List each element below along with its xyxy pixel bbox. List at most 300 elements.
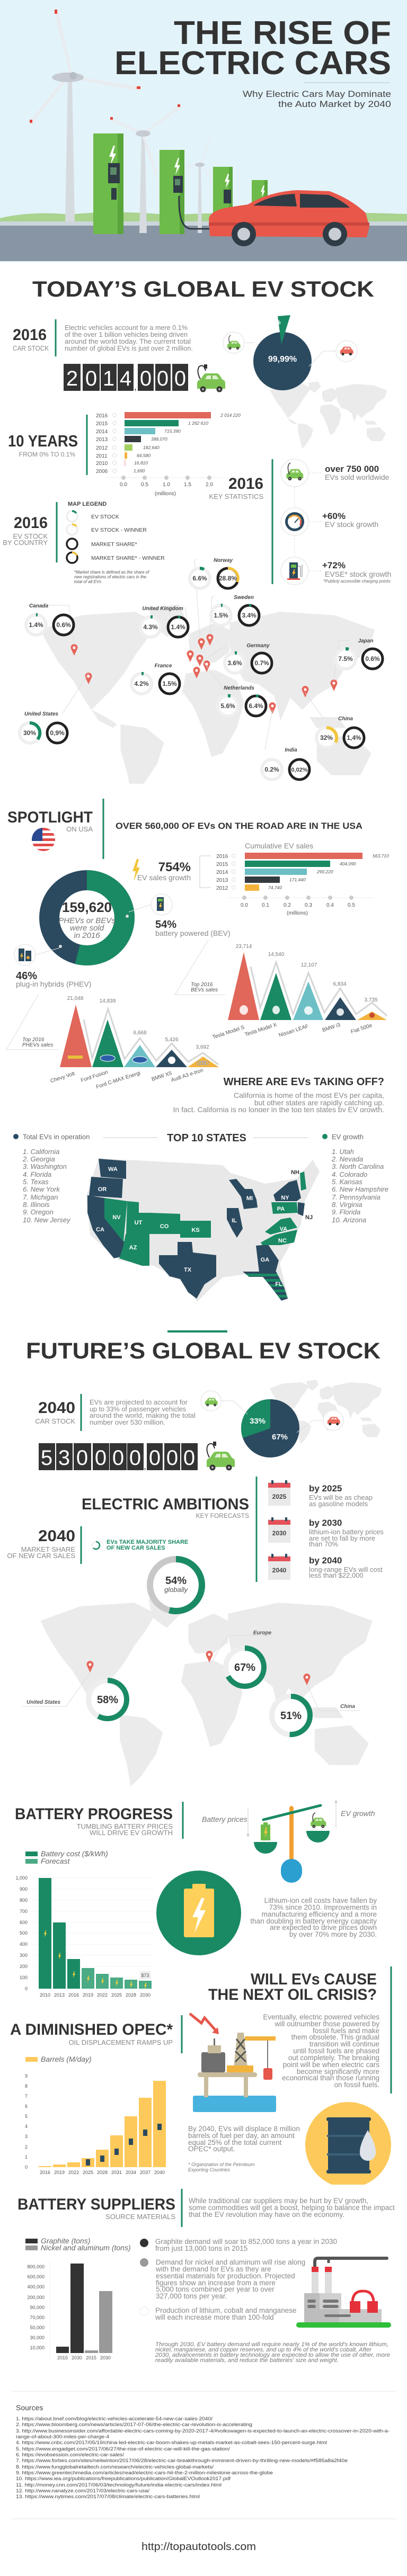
- odometer 2,014,000: 0: [85, 367, 97, 390]
- bar chart: cumulative EV sales: 0.0: [241, 902, 248, 908]
- country: United States: 0,9%: [50, 729, 65, 737]
- label: battery prices arrow down: Battery prices: [202, 1815, 247, 1823]
- pie chart: 0.1% vs 99.99%: 99,99%: [268, 355, 297, 364]
- map legend: EV STOCK - WINNER: [91, 527, 147, 533]
- odometer 2,014,000: ,: [134, 381, 137, 392]
- text: EVs outnumber fossil: [263, 2013, 379, 2089]
- sources list: 8. https://www.fungglobalretailtech.com/research/electric-vehicles-global-markets/: [16, 2464, 214, 2470]
- bar chart: oil displacement: 2028: [97, 2170, 108, 2175]
- country: Canada: 1.4%: [29, 621, 43, 629]
- bar chart: cumulative EV sales: 2016: [216, 854, 228, 860]
- legend: graphite and nickel: Graphite (tons): [41, 2237, 90, 2245]
- key stat: EV stock growth: [281, 508, 378, 535]
- odometer 2,014,000: 0: [140, 367, 152, 390]
- bar chart: graphite and nickel: 600,000: [27, 2274, 45, 2279]
- chart: top 2016 PHEV sales: 5,426: [165, 1037, 179, 1043]
- odometer 530,000,000: 0: [166, 1446, 178, 1470]
- windmill large: [29, 10, 141, 221]
- donut: Europe 67%: Europe: [253, 1630, 272, 1636]
- illustration: oil rig: [193, 2033, 276, 2112]
- bar chart: oil displacement: 3: [25, 2134, 28, 2139]
- sources list: 9. https://www.greentechmedia.com/articles/read/electric-cars-hit-the-2-million-milestone-across-the-globe: [16, 2470, 273, 2475]
- text: lithium-ion costs: by over 70% more by 2030.: [289, 1930, 377, 1938]
- country: Netherlands: 6.4%: [249, 702, 263, 710]
- US map: CA: [96, 1227, 104, 1233]
- 2016 EV stock by country label: EV STOCK: [13, 532, 48, 540]
- country: India: [262, 747, 309, 780]
- windmill medium: [110, 104, 181, 233]
- bullet: lithium cobalt manganese: [140, 2306, 296, 2321]
- chart: top 2016 BEV sales: [175, 940, 387, 1041]
- subtitle: the Auto Market by 2040: [278, 99, 391, 109]
- list: EV growth: 9. Florida: [332, 1208, 360, 1216]
- 2016 car stock label: CAR STOCK: [13, 344, 49, 352]
- bar chart: global EV stock 2006-2016: 2006: [96, 469, 108, 475]
- country: Norway: 6.6%: [192, 575, 207, 582]
- bar chart: graphite and nickel: 200,000: [27, 2295, 45, 2300]
- 2016 EV stock by country label: 2016: [14, 514, 48, 532]
- heading: electric ambitions: ELECTRIC AMBITIONS: [82, 1496, 249, 1513]
- bar chart: oil displacement: 2: [25, 2144, 28, 2150]
- charging stations: [93, 133, 268, 234]
- text: 8 million barrels: [188, 2125, 300, 2172]
- icon: green car with plug: [197, 364, 225, 392]
- bar chart: battery cost: 600: [20, 1920, 28, 1925]
- text: reserves note: Through 2030, EV battery demand will require nearly 1% of the world's known lithium,: [155, 2341, 388, 2348]
- bar chart: battery cost: $73: [141, 1973, 149, 1978]
- 2016 car stock label: 2016: [13, 326, 47, 344]
- key stat: EVSE growth: [281, 557, 391, 585]
- forecast: 2030: [268, 1517, 384, 1548]
- 2016 car stock label: [13, 326, 49, 352]
- callout: 46% PHEV: plug-in hybrids (PHEV): [16, 980, 91, 988]
- country: Germany: Germany: [246, 643, 270, 649]
- text: EVs outnumber fossil: out completely. The breaking: [288, 2054, 379, 2062]
- icon: EV in circle: [223, 332, 254, 353]
- chart: top 2016 BEV sales: Top 2016: [191, 982, 213, 988]
- sources list: range-of-about-300-miles-per-charge-4: [16, 2434, 109, 2439]
- sources list: 7. https://www.forbes.com/sites/neilwinton/2017/06/28/electric-car-breakthrough-imminent-driven-by-thrilling-new-models/#f585a8a2f40e: [16, 2458, 348, 2463]
- bar chart: global EV stock 2006-2016: 1 262 610: [188, 421, 208, 426]
- donut: Europe 67%: [206, 1630, 272, 1686]
- text: EVs outnumber fossil: economical than those running: [282, 2074, 379, 2082]
- text: lithium-ion costs: Lithium-ion cell costs have fallen by: [264, 1897, 377, 1904]
- forecast: 2030: are set to fall by more: [309, 1534, 375, 1542]
- list: total EVs: 10. New Jersey: [23, 1216, 71, 1224]
- bar chart: graphite and nickel: 10,000: [30, 2345, 45, 2350]
- bar chart: battery cost: 300: [20, 1953, 28, 1958]
- country: China: [316, 716, 364, 748]
- bar chart: cumulative EV sales: 0.2: [284, 902, 291, 908]
- text: lithium-ion costs: than doubling in battery energy capacity: [250, 1917, 377, 1925]
- 2040 car stock text: EVs are projected to account for: [90, 1398, 188, 1406]
- bar chart: cumulative EV sales: 171,440: [289, 877, 306, 882]
- donut: China 51%: 51%: [280, 1710, 302, 1722]
- US map: VA: [280, 1226, 287, 1232]
- pie chart: 0.1% vs 99.99%: [253, 315, 312, 390]
- text: lithium-ion costs: manufacturing efficiency and a more: [262, 1910, 377, 1918]
- country: Netherlands: Netherlands: [224, 685, 254, 691]
- bar chart: global EV stock 2006-2016: 2015: [96, 421, 108, 427]
- map legend: EV STOCK: [91, 514, 119, 520]
- bullet: nickel and aluminum: Demand for nickel and aluminum will rise along: [156, 2258, 305, 2266]
- odometer 530,000,000: [39, 1443, 198, 1471]
- 2040 market share label: OF NEW CAR SALES: [7, 1552, 75, 1560]
- 2016 key statistics label: 2016: [228, 475, 263, 493]
- heading: battery progress: WILL DRIVE EV GROWTH: [90, 1829, 173, 1837]
- country: Japan: 0.6%: [365, 655, 380, 663]
- text: EVs outnumber fossil: until fossil fuels are phased: [293, 2047, 379, 2055]
- bar chart: oil displacement: 9: [25, 2073, 28, 2079]
- car stock text: number of global EVs is just over 2 million.: [65, 344, 193, 352]
- heading: a diminished OPEC: [10, 2021, 173, 2046]
- list: total EVs: 2. Georgia: [22, 1155, 55, 1163]
- bar chart: cumulative EV sales: (millions): [287, 910, 308, 916]
- 2016 key statistics label: KEY STATISTICS: [209, 493, 263, 500]
- legend: EV growth: EV growth: [332, 1133, 364, 1141]
- section: world map EV stock by country: [18, 558, 384, 784]
- US map: IL: [232, 1218, 237, 1224]
- bar chart: graphite and nickel: 2030: [72, 2355, 82, 2360]
- red car: [209, 190, 369, 246]
- title: ELECTRIC CARS: [114, 45, 391, 82]
- pie chart: 33% vs 67%: 33%: [250, 1417, 266, 1426]
- bar chart: oil displacement: 2040: [154, 2170, 165, 2175]
- bar chart: oil displacement: 2025: [83, 2170, 93, 2175]
- bar chart: global EV stock 2006-2016: 388,070: [151, 436, 167, 442]
- bar chart: battery cost: 2025: [111, 1992, 122, 1998]
- odometer 2,014,000: [64, 364, 188, 392]
- country: United Kingdom: 4.3%: [143, 623, 158, 631]
- faint map behind pie: [270, 1380, 382, 1444]
- heading: battery suppliers: [17, 2196, 175, 2221]
- bar chart: global EV stock 2006-2016: 2014: [96, 429, 108, 435]
- chart: top 2016 PHEV sales: 21,048: [67, 996, 84, 1001]
- key stat: EVs sold: EVs sold worldwide: [325, 473, 390, 481]
- sources list: 10. https://www.iea.org/publications/freepublications/publication/GlobalEVOutlook2017.pdf: [16, 2476, 231, 2481]
- key stat: EVs sold: over 750 000: [325, 464, 379, 474]
- text: California note: California is home of the most EVs per capita,: [234, 1091, 384, 1099]
- text: California note: [173, 1091, 384, 1114]
- legend: battery cost: [25, 1849, 108, 1865]
- label: EV growth arrow up: [334, 1800, 375, 1828]
- bar chart: graphite and nickel: 90,000: [30, 2305, 45, 2310]
- sources list: 4. https://www.cnbc.com/2017/05/19/china-led-electric-car-boom-shakes-up-metals-market-as-cobalt-sees-150-percent-surge.html: [16, 2440, 327, 2445]
- bar chart: cumulative EV sales: [200, 842, 389, 916]
- legend: total EVs: Total EVs in operation: [23, 1133, 90, 1141]
- list: total EVs: 9. Oregon: [23, 1208, 54, 1216]
- bar chart: oil displacement: 5: [25, 2114, 28, 2119]
- stat: 754% sales growth: [132, 859, 191, 882]
- bar chart: oil displacement: 7: [25, 2094, 28, 2099]
- text: EVs outnumber fossil: Eventually, electric powered vehicles: [263, 2013, 379, 2021]
- map legend: total of all EVs: [74, 579, 101, 584]
- sources list: 6. https://evobsession.com/electric-car-sales/: [16, 2452, 125, 2457]
- list: EV growth: 5. Kansas: [332, 1178, 362, 1186]
- callout: EVs take majority share: [92, 1539, 188, 1551]
- country: United Kingdom: [140, 606, 188, 637]
- icon: US flag: [32, 828, 55, 852]
- bullet: nickel and aluminum: figures show an increase from a mere: [156, 2279, 276, 2287]
- country: France: 4.2%: [134, 680, 149, 687]
- bar chart: graphite and nickel: 2030: [100, 2355, 111, 2360]
- country: China: 1,4%: [347, 734, 361, 741]
- bullet: nickel and aluminum: with the demand for EVs as they are: [155, 2265, 271, 2273]
- bullet: nickel and aluminum: [140, 2258, 305, 2300]
- odometer 530,000,000: 0: [95, 1446, 107, 1470]
- 2040 car stock text: [90, 1398, 196, 1426]
- forecast: 2030: lithium-ion battery prices: [309, 1528, 384, 1536]
- section: sources and footer: [12, 2391, 396, 2553]
- 2040 car stock text: up to 33% of passenger vehicles: [90, 1405, 186, 1413]
- country: United Kingdom: 1.4%: [171, 623, 185, 631]
- donut: China 51%: China: [340, 1704, 355, 1710]
- forecast: 2040: by 2040: [309, 1555, 342, 1566]
- country: Germany: [225, 643, 272, 673]
- car stock text: around the world today. The current total: [65, 337, 191, 345]
- map legend: MAP LEGEND: [68, 501, 107, 507]
- text: lithium-ion costs: 73% since 2010. Improvements in: [269, 1903, 377, 1911]
- title: [114, 15, 391, 82]
- list: EV growth: 8. Virginia: [332, 1201, 362, 1209]
- country: China: 32%: [320, 734, 333, 741]
- bar chart: cumulative EV sales: Cumulative EV sales: [245, 842, 313, 850]
- icon: EV circle: [201, 1391, 247, 1414]
- title: THE RISE OF: [174, 15, 391, 51]
- bar chart: graphite and nickel: [27, 2261, 112, 2360]
- bar chart: oil displacement: 1: [25, 2154, 28, 2160]
- bar chart: cumulative EV sales: 0.3: [305, 902, 312, 908]
- forecast: 2025: [268, 1480, 373, 1508]
- bar chart: oil displacement: 2031: [111, 2170, 122, 2175]
- country: Sweden: Sweden: [234, 595, 254, 601]
- bar chart: battery cost: 2022: [97, 1992, 108, 1998]
- donut chart: PHEV vs BEV: [49, 880, 129, 955]
- icon: red falling arrow: [190, 2014, 219, 2034]
- legend: battery cost: Forecast: [41, 1857, 70, 1865]
- chart: top 2016 BEV sales: Fiat 500e: [350, 1023, 373, 1035]
- bar chart: global EV stock 2006-2016: 0.5: [141, 482, 148, 488]
- bar chart: battery cost: 1,000: [15, 1875, 28, 1881]
- pie chart: 0.1% vs 99.99%: 0,1%: [267, 319, 281, 326]
- 2040 car stock label: [35, 1399, 75, 1425]
- list: EV growth: 1. Utah: [332, 1148, 354, 1156]
- bar chart: oil displacement: 2037: [140, 2170, 151, 2175]
- sources list: 1. https://about.bnef.com/blog/electric-vehicles-accelerate-54-new-car-sales-2040/: [16, 2416, 213, 2421]
- chart: top 2016 BEV sales: Tesla Model S: [212, 1025, 245, 1041]
- forecast: 2025: 2025: [272, 1493, 287, 1500]
- bar chart: global EV stock 2006-2016: (millions): [155, 491, 176, 497]
- bar chart: battery cost: 800: [20, 1898, 28, 1903]
- 10 years label: 10 YEARS: [8, 432, 78, 450]
- list: EV growth: 4. Colorado: [332, 1170, 367, 1178]
- US map: FL: [275, 1281, 282, 1287]
- section: battery suppliers: [17, 2189, 395, 2364]
- key stat: EVs sold: [281, 459, 390, 487]
- 2040 market share label: [7, 1527, 75, 1560]
- heading: sources: Sources: [16, 2403, 43, 2412]
- bar chart: global EV stock 2006-2016: 1.0: [163, 482, 170, 488]
- bar chart: oil displacement: 4: [25, 2124, 28, 2129]
- chart: top 2016 PHEV sales: [6, 994, 219, 1090]
- bar chart: global EV stock 2006-2016: 2016: [96, 413, 108, 419]
- heading: battery progress: [15, 1805, 173, 1837]
- bar chart: cumulative EV sales: 563,710: [373, 853, 389, 858]
- car stock text: Electric vehicles account for a mere 0.1%: [65, 324, 188, 332]
- bar chart: global EV stock 2006-2016: 2012: [96, 445, 108, 451]
- bar chart: battery cost: 500: [20, 1930, 28, 1936]
- key stat: EV stock growth: +60%: [322, 511, 346, 521]
- chart: top 2016 BEV sales: Nissan LEAF: [278, 1023, 309, 1039]
- bar chart: cumulative EV sales: 2015: [216, 862, 228, 867]
- heading: spotlight: ON USA: [66, 825, 93, 833]
- donut chart: PHEV vs BEV: 159,620: [62, 899, 112, 915]
- chart: top 2016 BEV sales: 23,714: [236, 944, 252, 950]
- heading: a diminished OPEC: OIL DISPLACEMENT RAMPS UP: [69, 2038, 173, 2046]
- text: commodities boost: [189, 2197, 395, 2219]
- 2016 EV stock by country label: BY COUNTRY: [3, 539, 48, 547]
- list: total EVs: 5. Texas: [23, 1178, 49, 1186]
- key stat: EV stock growth: EV stock growth: [325, 520, 378, 529]
- bar chart: global EV stock 2006-2016: 715,390: [164, 428, 181, 434]
- chart: top 2016 PHEV sales: Chevy Volt: [50, 1071, 76, 1084]
- bar chart: oil displacement: 2022: [68, 2170, 79, 2175]
- 2040 car stock text: around the world, making the total: [90, 1411, 196, 1419]
- subtitle: [243, 89, 391, 109]
- odometer 530,000,000: 5: [41, 1446, 52, 1470]
- 2016 EV stock by country label: [3, 514, 48, 547]
- donut chart: PHEV vs BEV: in 2016: [74, 931, 100, 940]
- heading: spotlight: [7, 809, 93, 833]
- bar chart: global EV stock 2006-2016: 16,810: [134, 460, 148, 466]
- country: Germany: 3.6%: [227, 659, 242, 667]
- list: EV growth: 10. Arizona: [332, 1216, 366, 1224]
- US map: WA: [108, 1166, 118, 1173]
- country: France: [131, 663, 180, 694]
- bar chart: graphite and nickel: 2015: [57, 2355, 68, 2360]
- country: Sweden: [211, 595, 259, 625]
- bullet: graphite demand: Graphite demand will soar to 852,000 tons a year in 2030: [155, 2238, 337, 2246]
- chart: top 2016 PHEV sales: Ford C-MAX Energi: [95, 1070, 141, 1090]
- text: commodities boost: some commodities will get a boost, helping to balance the impact: [189, 2204, 395, 2212]
- sources list: 5. https://www.engadget.com/2017/06/27/the-rise-of-electric-car-will-kill-the-gas-station/: [16, 2446, 231, 2452]
- heading: will EVs cause the next oil crisis: [208, 1971, 377, 2003]
- bar chart: cumulative EV sales: 2012: [216, 885, 228, 891]
- US map: PA: [277, 1206, 285, 1212]
- bar chart: graphite and nickel: 70,000: [30, 2315, 45, 2320]
- bar chart: battery cost: 2019: [83, 1992, 93, 1998]
- bar chart: cumulative EV sales: 2014: [216, 870, 228, 875]
- bullet: lithium cobalt manganese: Production of lithium, cobalt and manganese: [155, 2306, 296, 2314]
- text: 8 million barrels: OPEC* output.: [188, 2145, 235, 2153]
- country: Sweden: 1.5%: [214, 612, 228, 619]
- heading: today's global EV stock: TODAY’S GLOBAL EV STOCK: [32, 276, 374, 301]
- bar chart: battery cost: 200: [20, 1964, 28, 1969]
- map legend: MARKET SHARE* - WINNER: [91, 555, 165, 561]
- bar chart: battery cost: [15, 1875, 154, 1998]
- icon: battery in green circle: [156, 1871, 241, 1955]
- forecast: 2025: as gasoline models: [309, 1500, 368, 1508]
- windmill small: [185, 139, 212, 233]
- heading: where are EVs taking off: WHERE ARE EVs TAKING OFF?: [224, 1076, 384, 1088]
- sources list: [16, 2416, 390, 2499]
- odometer 530,000,000: 0: [129, 1446, 141, 1470]
- donut chart: PHEV vs BEV: PHEVs or BEVs: [58, 916, 116, 925]
- bar chart: graphite and nickel: 50,000: [30, 2325, 45, 2330]
- US map: GA: [261, 1257, 269, 1263]
- list: total EVs: 1. California: [23, 1148, 59, 1156]
- bar chart: battery cost: 400: [20, 1942, 28, 1947]
- odometer 530,000,000: 3: [58, 1446, 70, 1470]
- sources list: 12. http://www.nanalyze.com/2017/03/electric-cars-usa/: [16, 2488, 150, 2493]
- car stock text: [65, 324, 193, 352]
- 2040 car stock label: CAR STOCK: [35, 1417, 75, 1425]
- chart: top 2016 PHEV sales: 3,692: [196, 1044, 209, 1050]
- odometer 2,014,000: 1: [103, 367, 114, 390]
- forecast: 2030: 2030: [272, 1529, 287, 1537]
- odometer 530,000,000: 0: [149, 1446, 161, 1470]
- country: Canada: Canada: [29, 603, 48, 609]
- callout: 46% PHEV: [14, 944, 91, 988]
- country: France: 1.5%: [162, 680, 177, 687]
- text: EVs outnumber fossil: transition will continue: [309, 2040, 379, 2048]
- bullet: nickel and aluminum: 327,000 tons per year.: [156, 2292, 227, 2300]
- heading: battery suppliers: SOURCE MATERIALS: [105, 2213, 175, 2221]
- icon: green car with plug: [207, 1442, 235, 1470]
- list: EV growth: 3. North Carolina: [332, 1162, 384, 1170]
- country: Canada: 0.6%: [56, 621, 71, 629]
- chart: top 2016 BEV sales: 3,735: [364, 997, 378, 1003]
- illustration: balance scale: [254, 1805, 330, 1883]
- legend: barrels: Barrels (M/day): [41, 2055, 92, 2063]
- bar chart: battery cost: 700: [20, 1909, 28, 1914]
- bullet: nickel and aluminum: 5,000 tons combined per year to over: [156, 2285, 275, 2293]
- callout: EVs take majority share: OF NEW CAR SALES: [107, 1545, 165, 1551]
- bar chart: graphite and nickel: 800,000: [27, 2264, 45, 2269]
- text: 8 million barrels: equal 25% of the total current: [188, 2139, 282, 2146]
- country: Japan: [335, 638, 383, 669]
- key stat: EVSE growth: +72%: [322, 560, 346, 570]
- odometer 2,014,000: 0: [157, 367, 169, 390]
- map legend: [67, 501, 165, 584]
- donut chart: PHEV vs BEV: were sold: [70, 924, 104, 933]
- bar chart: global EV stock 2006-2016: 64,580: [137, 453, 151, 458]
- text: reserves note: nickel, manganese, and copper reserves, and up to 4% of the world's cobalt. After: [155, 2347, 372, 2353]
- chart: top 2016 PHEV sales: Ford Fusion: [80, 1069, 109, 1084]
- country: United States: United States: [24, 711, 58, 717]
- donut: United States 58%: 58%: [97, 1694, 118, 1706]
- heading: will EVs cause the next oil crisis: THE NEXT OIL CRISIS?: [208, 1986, 377, 2003]
- list: total EVs: 8. Illinois: [23, 1201, 50, 1209]
- 10 years label: [8, 432, 78, 458]
- donut: Europe 67%: 67%: [234, 1662, 255, 1674]
- stat: 754% sales growth: 754%: [158, 860, 191, 874]
- bar chart: battery cost: 2016: [68, 1992, 79, 1998]
- bar chart: oil displacement: 2019: [54, 2170, 65, 2175]
- heading: a diminished OPEC: A DIMINISHED OPEC*: [10, 2021, 173, 2038]
- 10 years label: FROM 0% TO 0.1%: [19, 451, 75, 458]
- text: California note: but other states are rapidly catching up.: [254, 1098, 384, 1107]
- US map: NV: [112, 1214, 121, 1221]
- pie chart: 33% vs 67%: [241, 1399, 299, 1457]
- sources list: 3. http://www.businessinsider.com/affordable-electric-cars-coming-by-2020-2017-4/#volkswagen-is-expected-to-launch-an-electric-crossover-in-2020-with-a-: [16, 2428, 390, 2434]
- text: reserves note: readily available materials, and reduce the batteries' size and weight.: [155, 2357, 339, 2364]
- callout: 54% BEV: [129, 894, 231, 937]
- section: future's global EV stock: [7, 1338, 384, 1787]
- donut: 54% globally: 54%: [165, 1575, 187, 1587]
- odometer 2,014,000: 2: [66, 367, 78, 390]
- text: EVs outnumber fossil: will outnumber those powered by: [275, 2020, 379, 2028]
